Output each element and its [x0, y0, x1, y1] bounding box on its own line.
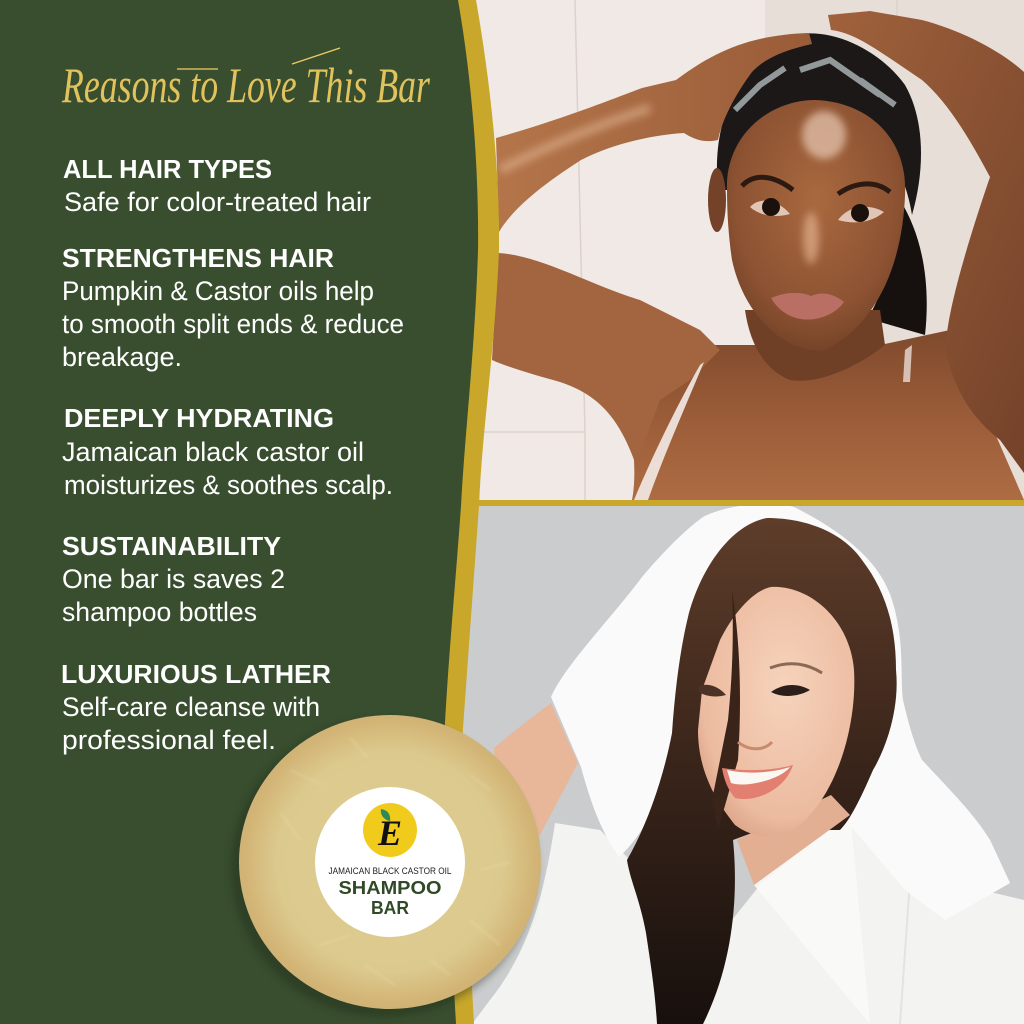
lips [771, 293, 844, 320]
photo: woman lathering hair in shower [470, 0, 1024, 500]
left raised forearm and hand [496, 33, 812, 232]
title [61, 48, 430, 113]
item: luxurious lather: professional feel. [62, 725, 276, 755]
grey studio background [440, 506, 1024, 1024]
item: sustainability [62, 531, 285, 627]
raised arm [494, 703, 578, 835]
braids behind head [872, 207, 927, 335]
nose highlight [803, 212, 819, 264]
label product name: BAR [371, 898, 409, 918]
shower tile wall [470, 0, 1024, 500]
label tagline: JAMAICAN BLACK CASTOR OIL [328, 866, 452, 876]
gold divider bar [470, 500, 1024, 506]
torso [625, 330, 1024, 500]
hair strand over face [712, 590, 740, 830]
right raised arm [828, 11, 1024, 473]
soap shadow [231, 719, 537, 1017]
item: deeply hydrating: DEEPLY HYDRATING [64, 403, 334, 433]
forearm sheen [500, 108, 650, 170]
item: strengthens hair: STRENGTHENS HAIR [62, 243, 334, 273]
green text panel [0, 0, 478, 1024]
item: all hair types: ALL HAIR TYPES [63, 154, 272, 184]
nose shadow [738, 742, 772, 749]
brand logo: E [377, 813, 402, 853]
item: sustainability: shampoo bottles [62, 597, 257, 627]
item: deeply hydrating: Jamaican black castor oil [62, 437, 364, 467]
brand logo [363, 803, 417, 857]
soap body [239, 715, 541, 1009]
forehead highlight [802, 111, 846, 159]
face [727, 100, 905, 350]
soap streak by arm [903, 345, 912, 382]
neck [745, 310, 885, 381]
item: luxurious lather: LUXURIOUS LATHER [61, 659, 331, 689]
item: strengthens hair [62, 243, 404, 372]
item: strengthens hair: breakage. [62, 342, 182, 372]
label product name [338, 878, 442, 918]
towel [551, 504, 1010, 920]
bathrobe [472, 810, 1024, 1024]
item: luxurious lather [61, 659, 331, 755]
soap texture [280, 738, 510, 985]
title: Reasons to Love This Bar [61, 57, 430, 113]
brows and eyes [699, 664, 822, 696]
face [698, 587, 854, 836]
photo: smiling woman drying hair with towel [440, 504, 1024, 1024]
left upper arm [492, 253, 720, 465]
smile [722, 765, 793, 799]
item: strengthens hair: to smooth split ends & reduce [62, 309, 404, 339]
gold curved band [440, 0, 499, 1024]
item: sustainability: One bar is saves 2 [62, 564, 285, 594]
item: deeply hydrating [62, 403, 393, 500]
long hair [627, 518, 897, 1024]
item: sustainability: SUSTAINABILITY [62, 531, 281, 561]
item: all hair types [63, 154, 371, 217]
item: luxurious lather: Self-care cleanse with [62, 692, 320, 722]
shampoo bar product [231, 715, 541, 1017]
item: strengthens hair: Pumpkin & Castor oils help [62, 276, 374, 306]
white label [315, 787, 465, 937]
ears [708, 168, 726, 232]
eyes and brows [742, 177, 890, 222]
hair with lather [717, 33, 921, 215]
label product name: SHAMPOO [338, 878, 442, 898]
item: all hair types: Safe for color-treated hair [64, 187, 371, 217]
foam streak on chest [634, 362, 704, 500]
neck [737, 795, 850, 885]
item: deeply hydrating: moisturizes & soothes scalp. [64, 470, 393, 500]
